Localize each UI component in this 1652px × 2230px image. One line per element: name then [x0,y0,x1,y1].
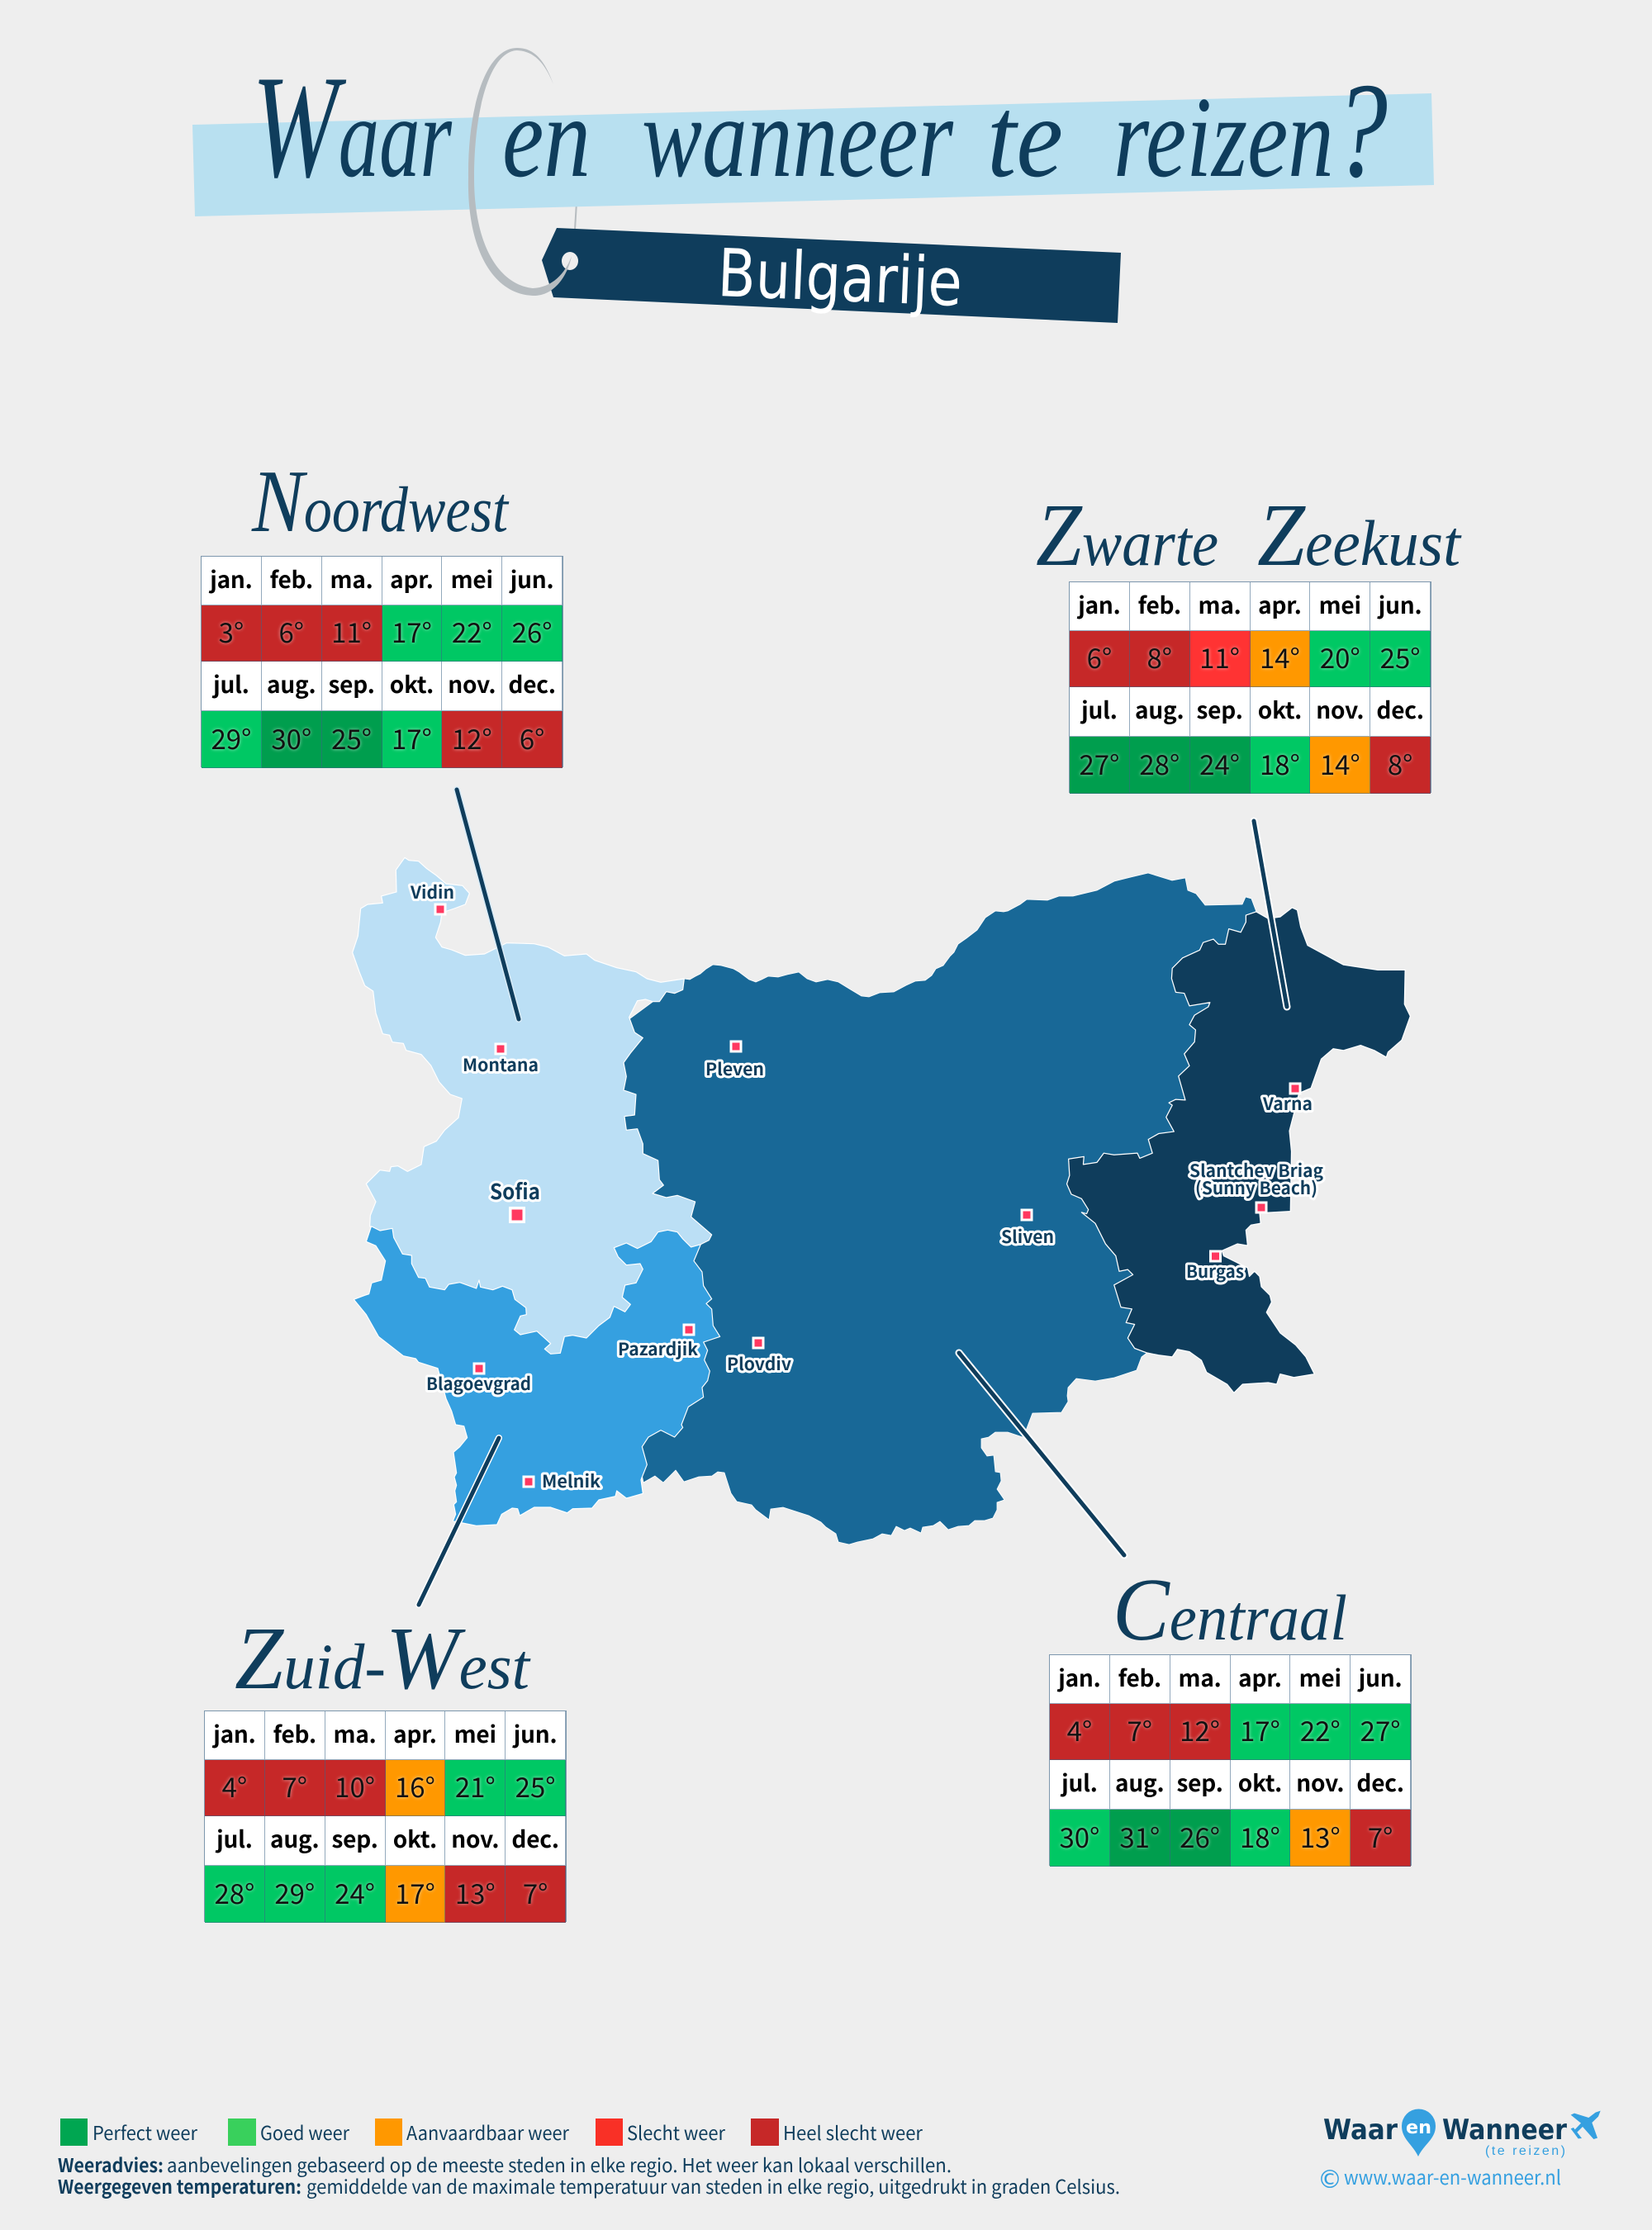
title [252,45,1388,208]
country name: Bulgarije [716,235,964,321]
table: Zuid-West: 7° [523,1872,548,1911]
icon: location pin [1402,2109,1436,2156]
table: Zuid-West: okt. [393,1822,437,1855]
table: Centraal: 13° [1300,1815,1341,1855]
table: Centraal: 27° [1360,1710,1401,1749]
table: Zuid-West: 25° [515,1766,555,1805]
table: Noordwest: jan. [210,562,253,595]
heading: Centraal: Centraal [1113,1561,1347,1659]
heading: Zwarte Zeekust: Zeekust [1257,486,1462,585]
table: Centraal: okt. [1238,1766,1282,1799]
table: Zwarte Zeekust: feb. [1138,588,1181,621]
table: Zuid-West: 21° [455,1766,496,1805]
city: Slantchev Briag [1189,1158,1323,1214]
table: Centraal: ma. [1179,1660,1222,1693]
table: Zwarte Zeekust: 8° [1388,743,1412,783]
table: Zwarte Zeekust: dec. [1376,693,1424,726]
city: Sofia [490,1175,540,1223]
table: Noordwest: mei [451,562,493,595]
table: Zwarte Zeekust: jun. [1379,588,1422,621]
legend: slecht weer: Slecht weer [627,2118,725,2146]
table: Noordwest: feb. [270,562,313,595]
table: Noordwest: 3° [219,611,244,651]
table: Noordwest: 17° [392,717,432,757]
table: Noordwest: 22° [452,611,492,651]
city: Plovdiv [727,1336,791,1376]
website: www.waar-en-wanneer.nl [1344,2161,1561,2190]
website: © [1317,2166,1342,2194]
logo: Wanneer [1442,2114,1567,2147]
city: Vidin: Vidin [410,880,454,904]
region: Zuid-West [354,1222,720,1525]
city: Slantchev Briag: (Sunny Beach) [1195,1175,1317,1200]
table: Zwarte Zeekust: aug. [1135,693,1184,726]
table: Zuid-West: 4° [222,1766,247,1805]
table: Noordwest: 12° [452,717,492,757]
table: Centraal: 30° [1059,1815,1099,1855]
table: Centraal: jan. [1058,1660,1101,1693]
table: Zwarte Zeekust: 24° [1199,743,1240,783]
table: Noordwest: 6° [278,611,304,651]
table: Noordwest: 29° [211,717,251,757]
table: Zuid-West: 7° [282,1766,307,1805]
table: Zwarte Zeekust: 25° [1380,637,1421,676]
legend: goed weer: Goed weer [260,2118,349,2146]
heading: Noordwest: Noordwest [251,453,510,551]
table: Zuid-West: sep. [332,1822,378,1855]
table: Centraal: 22° [1300,1710,1341,1749]
table: Centraal: 4° [1067,1710,1092,1749]
logo: Waar [1323,2114,1398,2147]
table: Zuid-West: mei [454,1716,496,1749]
table: Zwarte Zeekust: sep. [1197,693,1243,726]
city: Sofia: Sofia [490,1175,540,1206]
table: Centraal: 26° [1180,1815,1220,1855]
city: Pleven [705,1041,764,1081]
table: Zuid-West: 17° [395,1872,435,1911]
region: Centraal [611,873,1268,1544]
title: wanneer [642,74,953,202]
note: weergegeven temperaturen: Weergegeven temperaturen: [58,2171,301,2199]
table: Noordwest: sep. [329,667,375,700]
table: Zuid-West: aug. [270,1822,319,1855]
table: Zwarte Zeekust: okt. [1258,693,1302,726]
logo: en [1406,2118,1431,2138]
title: Waar [252,45,452,208]
table: Noordwest: apr. [390,562,434,595]
table: Centraal: jul. [1061,1766,1098,1799]
city: Blagoevgrad: Blagoevgrad [426,1371,531,1396]
title: en [502,74,591,202]
city: Slantchev Briag: Slantchev Briag [1189,1158,1323,1183]
title banner [192,93,1434,216]
legend: aanvaardbaar weer: Aanvaardbaar weer [406,2118,569,2146]
table: Centraal: 7° [1127,1710,1152,1749]
heading: Zuid-West: Zuid-West [235,1610,531,1708]
table: Noordwest: 25° [331,717,372,757]
table: Zuid-West: 29° [274,1872,315,1911]
table: Zuid-West: 28° [214,1872,254,1911]
table: Noordwest: okt. [390,667,434,700]
table: Zwarte Zeekust: 27° [1079,743,1119,783]
region: Zwarte Zeekust [1067,908,1410,1393]
legend: perfect weer: Perfect weer [93,2118,197,2146]
table: Zwarte Zeekust: 20° [1320,637,1360,676]
table: Zuid-West: jun. [514,1716,557,1749]
title: te [987,74,1063,202]
table: Centraal [1049,1654,1412,1866]
table: Centraal: 31° [1119,1815,1160,1855]
table: Noordwest: 30° [271,717,311,757]
logo: (te reizen) [1485,2144,1565,2158]
heading: Zwarte Zeekust [1036,486,1462,585]
table: Zwarte Zeekust: 11° [1199,637,1240,676]
connector: Centraal [959,1353,1124,1555]
city: Melnik: Melnik [542,1468,601,1493]
tag string [575,202,577,230]
table: Zuid-West: apr. [393,1716,437,1749]
table: Zwarte Zeekust: 14° [1320,743,1360,783]
legend [60,2118,923,2146]
table: Zuid-West: nov. [451,1822,499,1855]
table: Zwarte Zeekust [1069,581,1431,793]
city: Varna: Varna [1262,1091,1313,1116]
table: Zwarte Zeekust: mei [1319,588,1361,621]
table: Noordwest: aug. [267,667,316,700]
table: Zwarte Zeekust: ma. [1199,588,1241,621]
table: Noordwest: 6° [520,717,544,757]
country tag [542,228,1121,323]
city: Plovdiv: Plovdiv [727,1351,791,1376]
table: Centraal: dec. [1356,1766,1404,1799]
connector: Noordwest [457,790,519,1019]
table: Noordwest: 17° [392,611,432,651]
city: Montana: Montana [463,1052,539,1077]
table: Centraal: apr. [1238,1660,1282,1693]
table: Zuid-West: 13° [455,1872,496,1911]
connector: Zuid-West [419,1438,499,1605]
table: Zwarte Zeekust: jul. [1081,693,1118,726]
luggage tag ring [468,48,572,296]
heading: Zwarte Zeekust: Zwarte [1036,486,1218,585]
table: Noordwest: 11° [331,611,372,651]
table: Zuid-West: feb. [273,1716,316,1749]
table: Centraal: jun. [1359,1660,1402,1693]
note: weeradvies: Weeradvies: [58,2150,164,2178]
city: Pazardjik: Pazardjik [618,1336,698,1361]
table: Centraal: 12° [1180,1710,1220,1749]
table: Noordwest: ma. [330,562,373,595]
legend: heel slecht weer: Heel slecht weer [783,2118,923,2146]
table: Centraal: 17° [1240,1710,1280,1749]
logo [1323,2109,1601,2158]
table: Zuid-West: 24° [335,1872,375,1911]
table: Zuid-West: jan. [213,1716,256,1749]
table: Centraal: 7° [1368,1815,1393,1855]
table: Centraal: 18° [1240,1815,1280,1855]
table: Zwarte Zeekust: jan. [1078,588,1121,621]
table: Noordwest: nov. [448,667,496,700]
table: Zuid-West [204,1710,567,1922]
title: reizen? [1113,55,1388,206]
table: Zuid-West: ma. [334,1716,377,1749]
city: Vidin [410,880,454,915]
city: Pleven: Pleven [705,1056,764,1081]
note: weergegeven temperaturen: gemiddelde van de maximale temperatuur van steden in elke regio, uitgedrukt in graden Celsius. [306,2171,1120,2199]
table: Centraal: aug. [1115,1766,1164,1799]
connector: Zwarte Zeekust [1254,821,1287,1007]
city: Sliven [1001,1209,1054,1249]
table: Zwarte Zeekust: 14° [1260,637,1300,676]
table: Centraal: mei [1299,1660,1341,1693]
city: Sliven: Sliven [1001,1224,1054,1249]
table: Zuid-West: 10° [335,1766,375,1805]
table: Noordwest: 26° [512,611,552,651]
table: Zuid-West: 16° [395,1766,435,1805]
city: Burgas: Burgas [1186,1259,1244,1283]
table: Zwarte Zeekust: 18° [1260,743,1300,783]
table: Zwarte Zeekust: 6° [1087,637,1112,676]
table: Zwarte Zeekust: nov. [1316,693,1364,726]
table: Noordwest [201,556,563,767]
table: Zuid-West: dec. [511,1822,559,1855]
table: Zwarte Zeekust: apr. [1258,588,1302,621]
table: Zwarte Zeekust: 8° [1146,637,1172,676]
table: Noordwest: jun. [510,562,553,595]
table: Zuid-West: jul. [216,1822,253,1855]
table: Centraal: feb. [1118,1660,1161,1693]
table: Centraal: sep. [1177,1766,1223,1799]
note: weeradvies: aanbevelingen gebaseerd op de meeste steden in elke regio. Het weer kan lokaal verschillen. [167,2150,952,2178]
city: Pazardjik [618,1323,698,1361]
icon: airplane [1571,2111,1601,2139]
region: Noordwest [353,857,712,1354]
table: Noordwest: jul. [213,667,249,700]
map of Bulgaria [353,857,1410,1544]
table: Centraal: nov. [1296,1766,1344,1799]
table: Noordwest: dec. [508,667,556,700]
table: Zwarte Zeekust: 28° [1139,743,1180,783]
